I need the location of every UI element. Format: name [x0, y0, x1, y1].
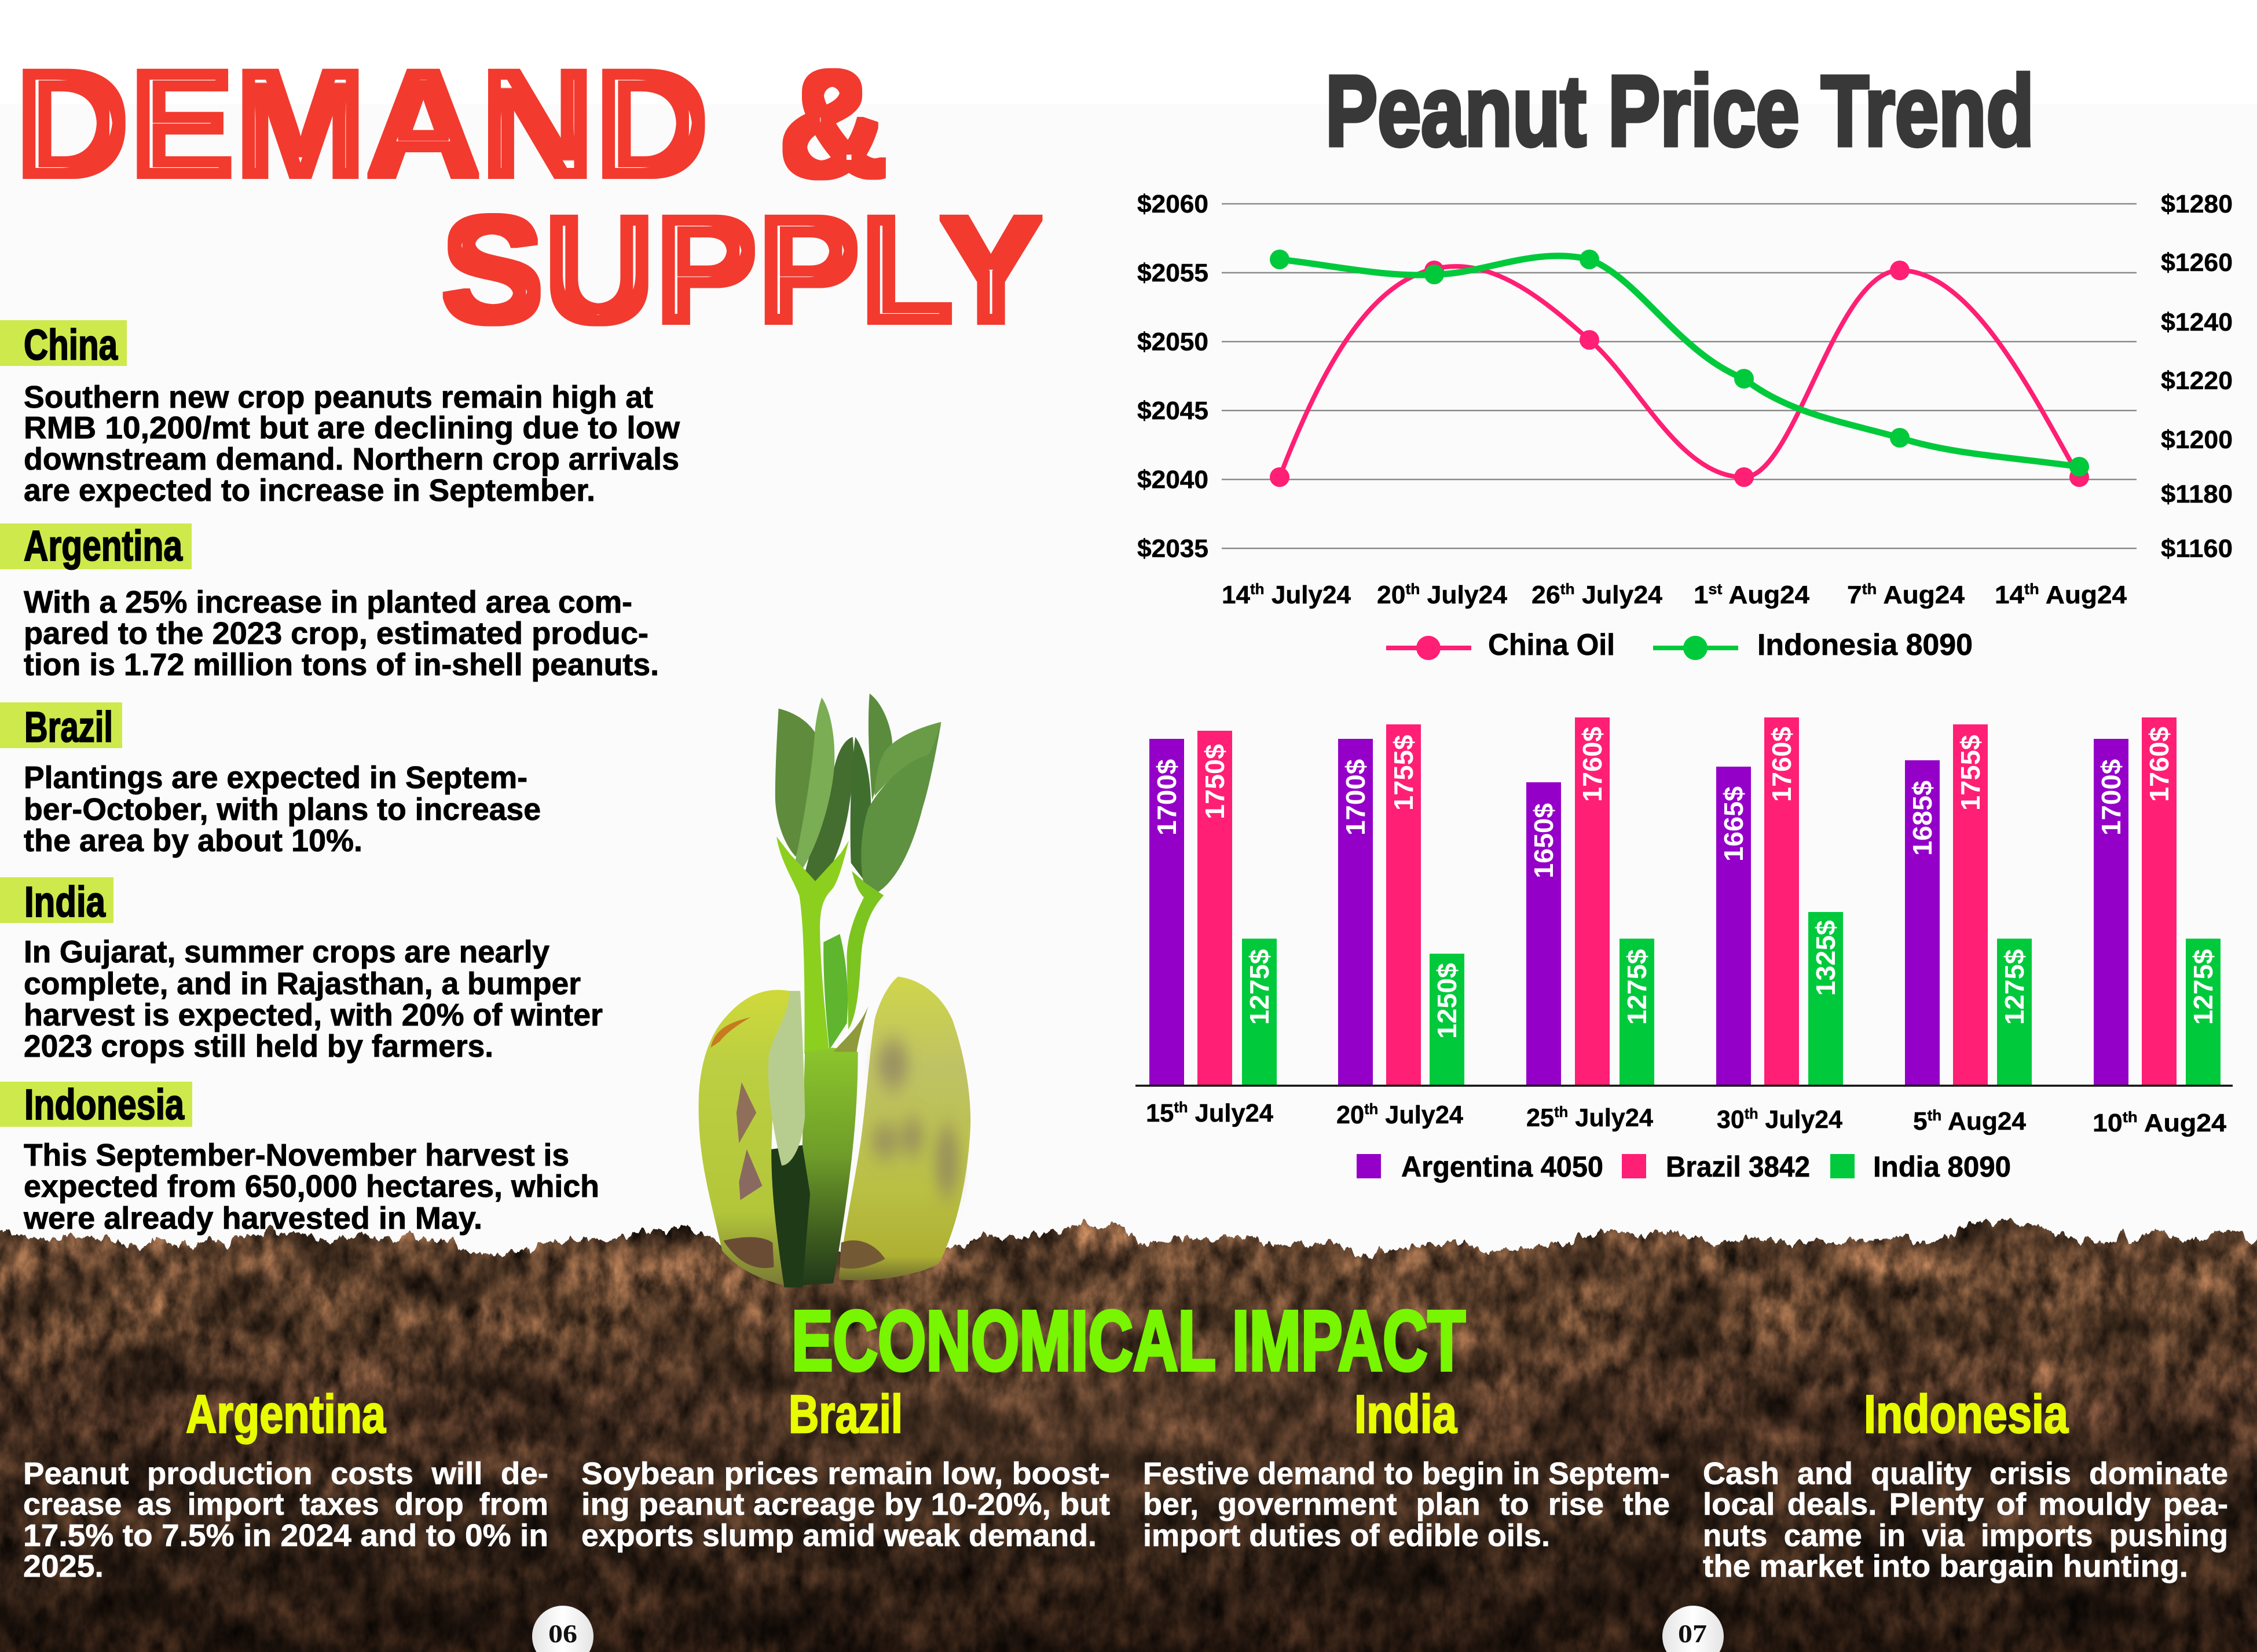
text: Argentina impact — [23, 1456, 548, 1584]
page number: 06: 06 — [548, 1620, 577, 1648]
text: Brazil paragraph: Plantings are expected in Septem- — [24, 760, 527, 795]
text: Brazil impact: ing peanut acreage by 10-20%, but — [581, 1487, 1110, 1522]
text: Indonesia impact: local deals. Plenty of mouldy pea- — [1703, 1487, 2228, 1522]
group: 10th Aug24: 1700$ — [2096, 759, 2126, 836]
text: Indonesia paragraph: This September-November harvest is — [24, 1138, 569, 1173]
right axis labels — [2161, 190, 2233, 563]
text: India paragraph: complete, and in Rajasthan, a bumper — [24, 966, 581, 1001]
left axis labels: $2045 — [1137, 397, 1208, 425]
column: Indonesia impact — [1703, 1384, 2228, 1584]
leaves — [775, 694, 941, 893]
text: Argentina impact: crease as import taxes drop from — [23, 1487, 548, 1522]
left axis labels: $2035 — [1137, 534, 1208, 563]
tag: China: China — [24, 321, 118, 369]
date labels: 7 — [1847, 581, 1861, 609]
panel: Indonesia supply note — [0, 1080, 599, 1236]
centre shoot — [797, 1047, 858, 1285]
group: 20th July24: 1250$ — [1432, 963, 1462, 1039]
legend: line chart: China Oil — [1488, 628, 1615, 662]
text: India paragraph: harvest is expected, with 20% of winter — [24, 998, 603, 1032]
date labels: st — [1708, 580, 1723, 598]
date labels: Aug24 — [1877, 581, 1965, 609]
right axis labels: $1260 — [2161, 248, 2233, 277]
text: Indonesia paragraph — [23, 1138, 599, 1236]
group: 25th July24 — [1526, 717, 1654, 1085]
right axis labels: $1160 — [2161, 534, 2233, 563]
group: 30th July24: 1760$ — [1767, 727, 1797, 802]
text: Indonesia impact — [1703, 1456, 2228, 1584]
date labels: bar chart: 30 — [1717, 1105, 1745, 1134]
text: India impact: import duties of edible oils. — [1143, 1518, 1550, 1553]
date labels: bar chart: July24 — [1568, 1104, 1654, 1132]
date labels: bar chart: th — [1745, 1105, 1758, 1122]
legend: bar chart — [1357, 1151, 2011, 1183]
date labels: bar chart: 25 — [1526, 1104, 1555, 1132]
date labels — [1222, 580, 2127, 609]
title: Demand & Supply — [15, 39, 1042, 354]
date labels: 14 — [1222, 581, 1250, 609]
line chart: peanut price trend — [1137, 190, 2233, 662]
date labels: 1 — [1694, 581, 1708, 609]
left axis labels: $2040 — [1137, 466, 1208, 494]
text: China paragraph — [24, 380, 680, 508]
date labels: bar chart: th — [2123, 1108, 2138, 1126]
date labels: bar chart: 10 — [2093, 1109, 2121, 1137]
right axis labels: $1200 — [2161, 426, 2233, 454]
legend: bar chart: Argentina 4050 — [1401, 1151, 1603, 1183]
text: India paragraph — [24, 935, 603, 1064]
text: Brazil impact — [581, 1456, 1110, 1553]
illustration: peanut sprout — [699, 694, 970, 1287]
heading: Indonesia: Indonesia — [1864, 1384, 2069, 1444]
date labels: bar chart: July24 — [1188, 1099, 1274, 1127]
group: 15th July24: 1275$ — [1244, 949, 1274, 1025]
text: China paragraph: Southern new crop peanuts remain high at — [24, 380, 653, 415]
text: India paragraph: In Gujarat, summer crops are nearly — [24, 935, 549, 969]
text: Argentina impact: Peanut production costs will de- — [23, 1456, 548, 1491]
date labels: th — [1405, 580, 1420, 598]
text: Argentina paragraph: With a 25% increase in planted area com- — [24, 585, 632, 620]
text: Brazil paragraph: ber-October, with plans to increase — [24, 792, 541, 827]
legend: line chart — [1386, 628, 1973, 662]
heading: India: India — [1354, 1384, 1457, 1444]
date labels: bar chart: 15 — [1146, 1099, 1174, 1127]
group: 10th Aug24: 1275$ — [2188, 949, 2218, 1025]
title: Demand & Supply: DEMAND — [15, 39, 709, 208]
date labels: 20 — [1377, 581, 1405, 609]
text: Indonesia impact: the market into bargain hunting. — [1703, 1549, 2188, 1584]
page number: 06 — [532, 1606, 593, 1652]
seed blemishes — [710, 1017, 885, 1269]
date labels: bar chart: Aug24 — [2138, 1109, 2227, 1137]
group: 15th July24: 1700$ — [1152, 759, 1182, 836]
text: Argentina paragraph: tion is 1.72 million tons of in-shell peanuts. — [24, 647, 659, 682]
column: India impact — [1143, 1384, 1670, 1553]
group: 30th July24: 1325$ — [1811, 920, 1841, 996]
text: China paragraph: downstream demand. Northern crop arrivals — [24, 442, 679, 477]
group: 5th Aug24: 1275$ — [1999, 949, 2029, 1025]
heading: Argentina: Argentina — [186, 1384, 386, 1444]
date labels: bar chart: 20 — [1336, 1101, 1365, 1129]
date labels: th — [2024, 580, 2039, 598]
group: 5th Aug24: 1755$ — [1955, 735, 1985, 811]
seed halves — [838, 977, 970, 1280]
text: Brazil impact: Soybean prices remain low, boost- — [581, 1456, 1110, 1491]
tag: Argentina: Argentina — [24, 522, 183, 570]
date labels: bar chart: th — [1928, 1107, 1941, 1124]
group: 20th July24: 1755$ — [1388, 735, 1419, 811]
group: 5th Aug24 — [1905, 724, 2032, 1085]
legend: line chart: Indonesia 8090 — [1757, 628, 1973, 662]
text: Indonesia impact: Cash and quality crisis dominate — [1703, 1456, 2228, 1491]
text: Brazil impact: exports slump amid weak demand. — [581, 1518, 1097, 1553]
group: 10th Aug24 — [2094, 717, 2221, 1085]
group: 20th July24 — [1338, 724, 1464, 1085]
legend: bar chart: India 8090 — [1873, 1151, 2011, 1183]
page number: 07: 07 — [1678, 1620, 1707, 1648]
text: China paragraph: are expected to increase in September. — [24, 473, 595, 508]
date labels: bar chart: Aug24 — [1941, 1107, 2027, 1135]
date labels: bar chart: th — [1364, 1100, 1378, 1118]
page number: 07 — [1662, 1606, 1724, 1652]
date labels: July24 — [1575, 581, 1663, 609]
text: Argentina impact: 2025. — [23, 1549, 104, 1584]
column: Brazil impact — [581, 1384, 1110, 1553]
soil background — [0, 1220, 2257, 1652]
panel: India supply note — [0, 877, 603, 1064]
panel: Argentina supply note — [0, 522, 659, 682]
date labels: bar chart — [1146, 1098, 2227, 1137]
date labels: Aug24 — [1722, 581, 1810, 609]
date labels: bar chart: 5 — [1913, 1107, 1927, 1135]
panel: Brazil supply note — [0, 702, 541, 858]
right axis labels: $1220 — [2161, 367, 2233, 395]
group: 30th July24: 1665$ — [1719, 786, 1749, 862]
group: 20th July24: 1700$ — [1340, 759, 1371, 836]
group: 5th Aug24: 1685$ — [1907, 781, 1937, 856]
text: Argentina paragraph — [24, 585, 659, 682]
text: India impact — [1143, 1456, 1670, 1553]
text: India impact: ber, government plan to rise the — [1143, 1487, 1670, 1522]
tag: India: India — [24, 878, 106, 926]
group: 15th July24: 1750$ — [1200, 744, 1230, 819]
date labels: 14 — [1995, 581, 2023, 609]
left axis labels — [1137, 190, 1208, 563]
tag: Indonesia: Indonesia — [24, 1080, 185, 1129]
group: 30th July24 — [1716, 717, 1843, 1085]
text: India paragraph: 2023 crops still held by farmers. — [24, 1029, 493, 1064]
text: India impact: Festive demand to begin in Septem- — [1143, 1456, 1670, 1491]
heading: Brazil: Brazil — [789, 1384, 903, 1444]
right axis labels: $1240 — [2161, 308, 2233, 336]
text: Indonesia paragraph: were already harvested in May. — [23, 1201, 482, 1236]
tag: Brazil: Brazil — [24, 703, 113, 751]
date labels: bar chart: July24 — [1378, 1101, 1464, 1129]
group: 25th July24: 1760$ — [1577, 727, 1607, 802]
date labels: th — [1250, 580, 1265, 598]
date labels: bar chart: July24 — [1758, 1105, 1843, 1134]
date labels: th — [1560, 580, 1575, 598]
left axis labels: $2055 — [1137, 259, 1208, 287]
title: Demand & Supply: SUPPLY — [441, 185, 1042, 354]
tag: Brazil — [0, 702, 122, 751]
text: Indonesia paragraph: expected from 650,000 hectares, which — [24, 1169, 599, 1204]
series: China Oil — [1270, 261, 2089, 487]
text: Argentina paragraph: pared to the 2023 crop, estimated produc- — [24, 616, 648, 651]
group: 25th July24: 1650$ — [1529, 803, 1559, 878]
bar chart: export prices — [1135, 717, 2233, 1183]
left axis labels: $2060 — [1137, 190, 1208, 218]
group: 15th July24 — [1149, 731, 1277, 1085]
panel: China supply note — [0, 320, 680, 508]
group: 10th Aug24: 1760$ — [2144, 727, 2174, 802]
heading: Peanut Price Trend: Peanut Price Trend — [1325, 54, 2034, 167]
column: Argentina impact — [23, 1384, 548, 1584]
left axis labels: $2050 — [1137, 328, 1208, 356]
right axis labels: $1280 — [2161, 190, 2233, 218]
text: Brazil paragraph — [24, 760, 541, 858]
text: Brazil paragraph: the area by about 10%. — [24, 823, 362, 858]
date labels: bar chart: th — [1554, 1103, 1568, 1120]
date labels: bar chart: th — [1174, 1098, 1188, 1116]
date labels: July24 — [1420, 581, 1508, 609]
group: 25th July24: 1275$ — [1622, 949, 1652, 1025]
date labels: th — [1862, 580, 1877, 598]
legend: bar chart: Brazil 3842 — [1666, 1151, 1810, 1183]
text: Indonesia impact: nuts came in via imports pushing — [1703, 1518, 2228, 1553]
stems — [776, 837, 884, 1054]
text: China paragraph: RMB 10,200/mt but are declining due to low — [24, 411, 680, 445]
text: Argentina impact: 17.5% to 7.5% in 2024 and to 0% in — [23, 1518, 548, 1553]
right axis labels: $1180 — [2161, 480, 2233, 508]
heading: Economical Impact: ECONOMICAL IMPACT — [792, 1294, 1465, 1389]
date labels: Aug24 — [2039, 581, 2127, 609]
series: Indonesia 8090 — [1270, 250, 2089, 477]
date labels: July24 — [1265, 581, 1351, 609]
title: Demand & Supply: & — [779, 39, 888, 208]
date labels: 26 — [1531, 581, 1560, 609]
